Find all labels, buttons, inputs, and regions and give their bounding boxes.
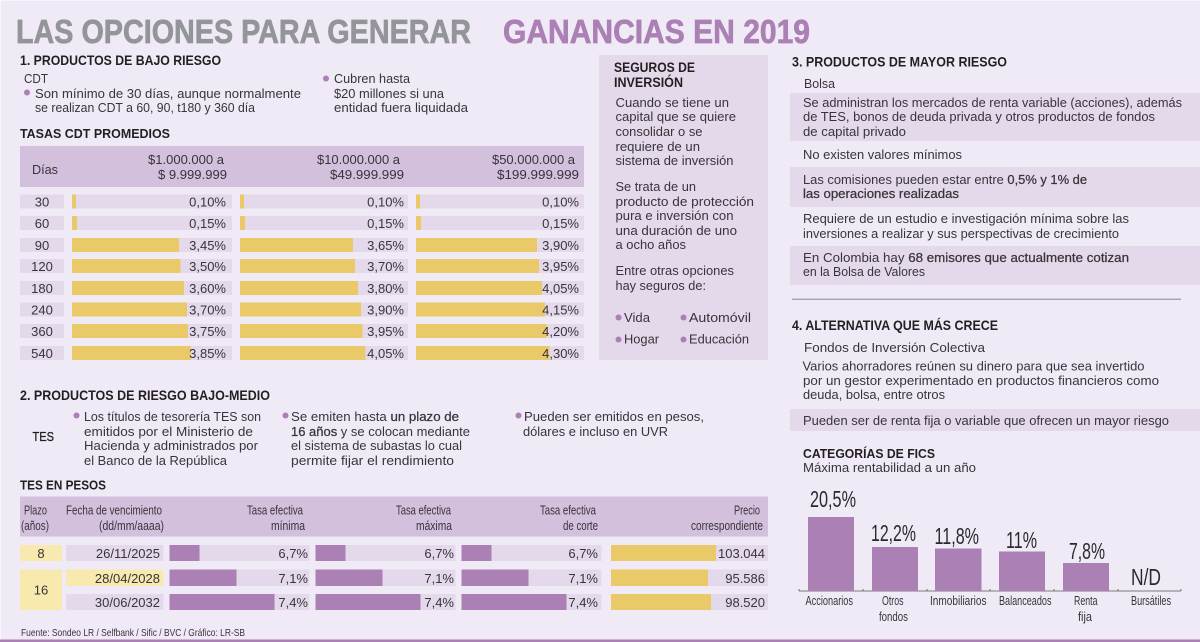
row: 120 days bbox=[20, 259, 584, 274]
bullet text: CDT minimum term: Son mínimo de 30 días, aunque normalmente bbox=[35, 86, 301, 101]
row: 180 days: 3,80% bbox=[367, 281, 404, 296]
bullet text: TES issuers bbox=[74, 409, 261, 468]
text: insurance options intro: hay seguros de: bbox=[616, 278, 706, 293]
row: 90 days bbox=[20, 238, 584, 253]
row: maturity 2032: 7,4% bbox=[278, 595, 308, 610]
table header: Tasa efectiva bbox=[540, 502, 597, 518]
bar: Inmobiliarios: Inmobiliarios bbox=[930, 593, 987, 608]
text: insurance intro: consolidar o se bbox=[616, 124, 702, 139]
table header: $ 9.999.999 bbox=[158, 167, 227, 182]
row: maturity 2028: 28/04/2028 bbox=[95, 571, 160, 586]
bar: Bursátiles no data: Bursátiles bbox=[1131, 593, 1171, 608]
row: 120 days: 3,95% bbox=[542, 259, 579, 274]
panel: investment insurance bbox=[599, 55, 768, 360]
table header: Precio bbox=[734, 502, 760, 518]
bar: Otros fondos: Otros bbox=[882, 593, 904, 608]
text: Bolsa label: Bolsa bbox=[804, 76, 836, 91]
bullet text: TES issuers: el Banco de la República bbox=[84, 453, 228, 468]
chart: FIC categories bar chart bbox=[799, 446, 1181, 624]
table header: $199.999.999 bbox=[497, 167, 579, 182]
row: 8 year term: 6,7% bbox=[424, 546, 454, 561]
table header: de corte bbox=[563, 518, 598, 533]
heading: FIC categories: Máxima rentabilidad a un año bbox=[803, 460, 976, 475]
text block: markets: de TES, bonos de deuda privada y otros productos de fondos bbox=[803, 109, 1155, 124]
bar: Inmobiliarios: 11,8% bbox=[934, 523, 979, 549]
row: 60 days: 0,15% bbox=[542, 216, 579, 231]
text: insurance options intro bbox=[616, 263, 734, 293]
list: insurance types: Vida bbox=[624, 310, 651, 325]
table header: Tasa efectiva bbox=[396, 502, 452, 518]
row: 120 days: 3,70% bbox=[367, 259, 404, 274]
text: insurance intro bbox=[616, 95, 736, 168]
table header: (dd/mm/aaaa) bbox=[99, 518, 164, 533]
table header: $50.000.000 a bbox=[492, 152, 576, 167]
row: 120 days: 120 bbox=[31, 259, 53, 274]
row: maturity 2032: 7,4% bbox=[424, 595, 454, 610]
list: insurance types: Educación bbox=[689, 332, 749, 346]
row: 16 year term: 16 bbox=[34, 582, 48, 598]
row: 8 year term: 6,7% bbox=[568, 546, 598, 561]
text: insurance description: una duración de uno bbox=[616, 223, 737, 238]
row: maturity 2032: 7,4% bbox=[568, 595, 598, 610]
list: insurance types: Hogar bbox=[624, 332, 660, 346]
row: 240 days bbox=[20, 302, 584, 318]
text block: issuers: En Colombia hay 68 emisores que actualmente cotizan bbox=[803, 250, 1129, 265]
text block: funds description: por un gestor experimentado en productos financieros como bbox=[803, 373, 1159, 388]
text: source note: Fuente: Sondeo LR / Selfbank / Sific / BVC / Gráfico: LR-SB bbox=[21, 627, 245, 639]
table header: $10.000.000 a bbox=[317, 152, 401, 167]
bar: Otros fondos bbox=[871, 520, 918, 624]
bullet text: CDT coverage bbox=[323, 71, 469, 115]
table header: Plazo bbox=[24, 502, 47, 518]
bar: Accionarios bbox=[806, 486, 856, 608]
text: insurance description: a ocho años bbox=[616, 237, 686, 252]
row: 16 year term bbox=[20, 570, 768, 610]
panel: section 4 fastest-growing alternative bbox=[790, 317, 1200, 431]
row: 180 days: 4,05% bbox=[542, 281, 579, 296]
bullet text: TES issuers: Los títulos de tesorería TES son bbox=[84, 409, 261, 424]
bullet text: TES term: 16 años y se colocan mediante bbox=[291, 424, 470, 439]
title bbox=[16, 13, 810, 50]
row: maturity 2032 bbox=[66, 594, 768, 610]
text block: issuers bbox=[790, 246, 1200, 285]
row: 30 days: 0,10% bbox=[189, 194, 226, 210]
bottom bar bbox=[0, 640, 1200, 642]
text: insurance description: pura e inversión con bbox=[616, 208, 734, 223]
bullet text: CDT coverage: entidad fuera liquidada bbox=[334, 100, 469, 115]
heading: FIC categories: CATEGORÍAS DE FICS bbox=[803, 446, 935, 461]
bullet text: TES term: permite fijar el rendimiento bbox=[291, 453, 454, 468]
row: maturity 2028: 7,1% bbox=[278, 571, 308, 586]
text block: markets: Se administran los mercados de renta variable (acciones), además bbox=[803, 95, 1182, 110]
row: 90 days: 90 bbox=[35, 238, 49, 253]
row: maturity 2028 bbox=[66, 570, 768, 586]
heading: CDT rates: TASAS CDT PROMEDIOS bbox=[20, 126, 170, 141]
heading: section 1: 1. PRODUCTOS DE BAJO RIESGO bbox=[20, 52, 221, 68]
row: 60 days: 0,15% bbox=[367, 216, 404, 231]
table header: Tasa efectiva bbox=[247, 502, 304, 518]
text: insurance intro: sistema de inversión bbox=[616, 153, 734, 168]
text block: research: Requiere de un estudio e investigación mínima sobre las bbox=[803, 211, 1129, 226]
bullet text: TES term bbox=[282, 409, 470, 468]
row: 240 days: 3,90% bbox=[367, 302, 404, 318]
text: insurance description: producto de protección bbox=[616, 194, 754, 209]
row: 180 days bbox=[20, 281, 584, 296]
bullet text: CDT coverage: Cubren hasta bbox=[334, 71, 411, 86]
text block: commissions: Las comisiones pueden estar entre 0,5% y 1% de bbox=[803, 172, 1087, 187]
bar: Bursátiles no data bbox=[1131, 564, 1171, 608]
text: insurance options intro: Entre otras opciones bbox=[616, 263, 734, 278]
text block: commissions: las operaciones realizadas bbox=[803, 186, 959, 201]
row: 360 days: 3,75% bbox=[189, 324, 226, 339]
row: 180 days: 180 bbox=[31, 281, 53, 296]
row: 360 days: 3,95% bbox=[367, 324, 404, 339]
table header bbox=[20, 496, 768, 536]
text: insurance intro: Cuando se tiene un bbox=[616, 95, 729, 110]
row: maturity 2028: 95.586 bbox=[725, 571, 765, 586]
row: 360 days: 360 bbox=[31, 324, 53, 339]
text block: commissions bbox=[790, 167, 1200, 207]
row: 90 days: 3,65% bbox=[367, 238, 404, 253]
bar: Inmobiliarios bbox=[930, 523, 987, 608]
row: 540 days: 3,85% bbox=[189, 346, 226, 361]
table header: Días bbox=[32, 162, 58, 177]
text block: no minimums: No existen valores mínimos bbox=[803, 147, 962, 162]
text block: research: inversiones a realizar y sus perspectivas de crecimiento bbox=[803, 226, 1119, 241]
bullet text: TES currencies: dólares e incluso en UVR bbox=[523, 424, 668, 439]
table header: (años) bbox=[21, 518, 49, 533]
bar: Accionarios: 20,5% bbox=[810, 486, 856, 512]
table header: mínima bbox=[271, 518, 306, 533]
heading: section 3: 3. PRODUCTOS DE MAYOR RIESGO bbox=[792, 54, 1007, 70]
row: maturity 2032: 30/06/2032 bbox=[95, 595, 160, 610]
title: LAS OPCIONES PARA GENERAR bbox=[16, 13, 471, 50]
table header: correspondiente bbox=[691, 518, 763, 533]
bullet text: CDT minimum term bbox=[24, 86, 301, 115]
row: maturity 2028: 7,1% bbox=[568, 571, 598, 586]
heading: insurance bbox=[614, 60, 695, 90]
bar: Balanceados: 11% bbox=[1006, 527, 1037, 553]
bullet text: TES issuers: emitidos por el Ministerio de bbox=[84, 424, 253, 439]
bullet text: CDT minimum term: se realizan CDT a 60, 90, t180 y 360 día bbox=[35, 100, 256, 115]
text: funds label: Fondos de Inversión Colectiva bbox=[804, 340, 986, 355]
row: 90 days: 3,45% bbox=[189, 238, 226, 253]
row: maturity 2028: 7,1% bbox=[424, 571, 454, 586]
text block: fixed or variable income bbox=[790, 409, 1200, 431]
table header: $49.999.999 bbox=[330, 167, 404, 182]
row: 30 days: 0,10% bbox=[367, 194, 404, 210]
table header: $1.000.000 a bbox=[148, 152, 225, 167]
row: 90 days: 3,90% bbox=[542, 238, 579, 253]
bullet text: TES term: el sistema de subastas lo cual bbox=[291, 438, 462, 453]
bullet text: TES issuers: Hacienda y administrados por bbox=[84, 438, 259, 453]
text: insurance intro: capital que se quiere bbox=[616, 109, 736, 124]
row: 360 days bbox=[20, 324, 584, 339]
row: 180 days: 3,60% bbox=[189, 281, 226, 296]
heading: section 4: 4. ALTERNATIVA QUE MÁS CRECE bbox=[792, 317, 998, 333]
title: GANANCIAS EN 2019 bbox=[503, 13, 810, 50]
bar: Bursátiles no data: N/D bbox=[1131, 564, 1161, 590]
heading: FIC categories bbox=[803, 446, 976, 475]
bar: Renta fija: 7,8% bbox=[1069, 538, 1105, 564]
row: 8 year term bbox=[20, 545, 768, 561]
bar: Otros fondos: fondos bbox=[879, 609, 908, 624]
row: 60 days: 0,15% bbox=[189, 216, 226, 231]
bar: Balanceados bbox=[999, 527, 1052, 608]
row: maturity 2032: 98.520 bbox=[725, 595, 765, 610]
bar: Renta fija: fija bbox=[1078, 609, 1093, 624]
text block: funds description: deuda, bolsa, entre otros bbox=[803, 387, 945, 402]
row: 540 days: 4,05% bbox=[367, 346, 404, 361]
row: 8 year term: 26/11/2025 bbox=[96, 546, 160, 561]
heading: TES in pesos: TES EN PESOS bbox=[20, 478, 106, 492]
bar: Renta fija bbox=[1063, 538, 1109, 624]
row: 240 days: 3,70% bbox=[189, 302, 226, 318]
chart: TES in pesos table bbox=[20, 478, 768, 610]
text block: funds description: Varios ahorradores reúnen su dinero para que sea invertido bbox=[802, 358, 1144, 374]
bar: Accionarios: Accionarios bbox=[806, 593, 853, 608]
chart: CDT average rates table bbox=[20, 126, 584, 361]
row: 240 days: 240 bbox=[31, 302, 53, 318]
row: 540 days bbox=[20, 346, 584, 361]
row: 60 days bbox=[20, 216, 584, 231]
row: 30 days bbox=[20, 194, 584, 210]
panel: section 3 higher-risk products bbox=[790, 54, 1200, 285]
text block: issuers: en la Bolsa de Valores bbox=[803, 264, 925, 279]
heading: insurance: SEGUROS DE bbox=[614, 60, 695, 75]
text block: funds description bbox=[802, 358, 1159, 402]
row: 360 days: 4,20% bbox=[542, 324, 579, 339]
row: 60 days: 60 bbox=[35, 216, 49, 231]
row: 540 days: 540 bbox=[31, 346, 53, 361]
row: 8 year term: 6,7% bbox=[278, 546, 308, 561]
bullet text: TES term: Se emiten hasta un plazo de bbox=[291, 409, 459, 424]
text block: research bbox=[803, 211, 1129, 241]
row: 30 days: 0,10% bbox=[542, 194, 579, 210]
bar: Balanceados: Balanceados bbox=[999, 593, 1052, 608]
table header bbox=[20, 146, 584, 187]
bullet text: TES currencies bbox=[516, 409, 704, 439]
text block: markets bbox=[790, 93, 1200, 141]
row: 8 year term: 103.044 bbox=[718, 546, 765, 561]
row: 120 days: 3,50% bbox=[189, 259, 226, 274]
bar: Otros fondos: 12,2% bbox=[871, 520, 916, 546]
text: insurance description bbox=[616, 179, 754, 252]
text: CDT label: CDT bbox=[24, 71, 48, 86]
table header: Fecha de vencimiento bbox=[66, 502, 162, 518]
row: 30 days: 30 bbox=[35, 194, 49, 210]
text block: markets: de capital privado bbox=[803, 124, 906, 139]
row: 8 year term: 8 bbox=[37, 546, 45, 561]
row: 240 days: 4,15% bbox=[542, 302, 579, 318]
heading: section 2: 2. PRODUCTOS DE RIESGO BAJO-MEDIO bbox=[20, 387, 270, 403]
text: insurance description: Se trata de un bbox=[616, 179, 696, 194]
bar: Renta fija: Renta bbox=[1074, 593, 1098, 608]
row: 540 days: 4,30% bbox=[542, 346, 579, 361]
list: insurance types bbox=[616, 310, 751, 346]
panel: section 2 low-medium risk products bbox=[20, 387, 704, 468]
bullet text: TES currencies: Pueden ser emitidos en pesos, bbox=[524, 409, 704, 424]
heading: insurance: INVERSIÓN bbox=[614, 75, 683, 90]
table header: máxima bbox=[416, 518, 453, 533]
list: insurance types: Automóvil bbox=[689, 310, 751, 325]
panel: section 1 low-risk products bbox=[20, 52, 469, 115]
text: TES label: TES bbox=[32, 429, 54, 444]
text block: fixed or variable income: Pueden ser de renta fija o variable que ofrecen un mayor riesgo bbox=[803, 413, 1169, 428]
text: insurance intro: requiere de un bbox=[616, 139, 700, 154]
bullet text: CDT coverage: $20 millones si una bbox=[334, 86, 445, 101]
